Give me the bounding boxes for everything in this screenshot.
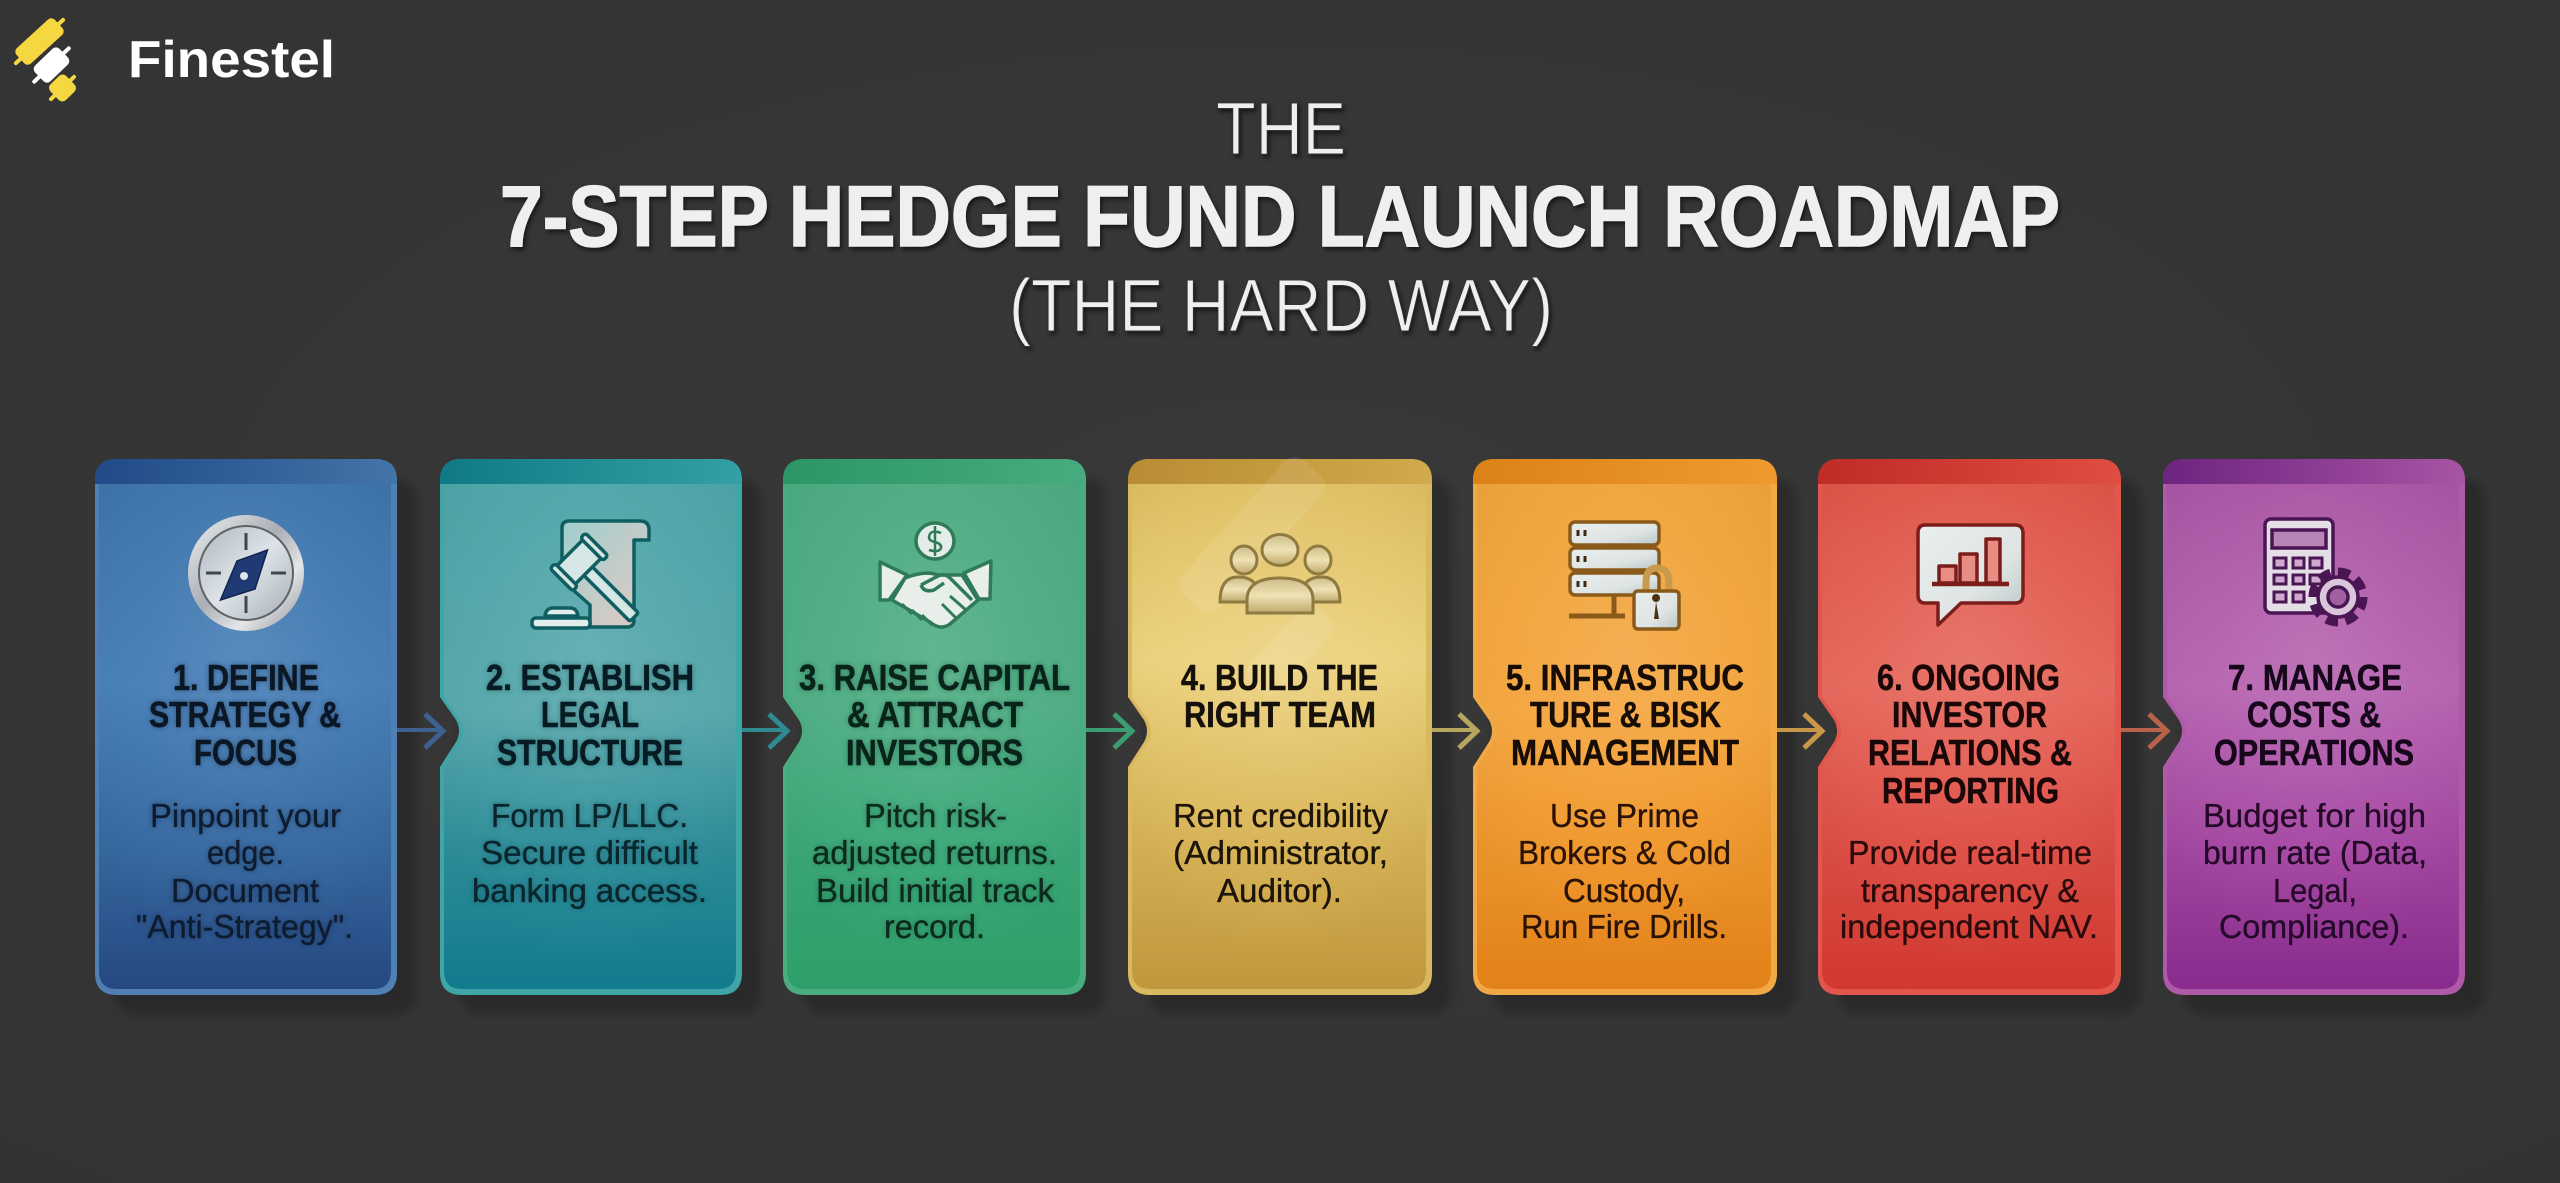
panel: step 4 build team: [1128, 451, 1432, 995]
description: Run Fire Drills.: [1521, 908, 1727, 945]
title line: main heading: 7-STEP HEDGE FUND LAUNCH ROADMAP: [500, 169, 2060, 265]
heading: MANAGEMENT: [1511, 732, 1739, 773]
description: (Administrator,: [1173, 834, 1388, 871]
description: "Anti-Strategy".: [136, 908, 353, 945]
panel: step 1 define strategy: [95, 459, 397, 995]
description: Auditor).: [1217, 872, 1342, 909]
description: Secure difficult: [481, 834, 698, 871]
icon: gavel and scroll: [532, 521, 652, 635]
description: edge.: [207, 834, 284, 871]
description: [2203, 797, 2427, 945]
logo: Finestel: [9, 12, 335, 107]
icon: compass: [188, 515, 304, 631]
description: Provide real-time: [1848, 834, 2092, 871]
title line: subtitle: (THE HARD WAY): [1009, 264, 1553, 347]
arrow 5 to 6: [1777, 714, 1822, 748]
heading: [149, 657, 341, 773]
title: [500, 87, 2060, 347]
description: burn rate (Data,: [2203, 834, 2427, 871]
arrow 3 to 4: [1086, 714, 1132, 748]
heading: COSTS &: [2247, 694, 2381, 735]
heading: 5. INFRASTRUC: [1506, 657, 1744, 698]
heading: 1. DEFINE: [173, 657, 319, 698]
heading: [1181, 657, 1378, 735]
heading: [2214, 657, 2414, 773]
description: Use Prime: [1550, 797, 1699, 834]
description: independent NAV.: [1840, 908, 2098, 945]
heading: OPERATIONS: [2214, 732, 2414, 773]
heading: [799, 657, 1070, 773]
panel: step 3 raise capital: [783, 459, 1086, 995]
panel: step 6 investor relations: [1818, 459, 2121, 995]
icon: chat with bar chart: [1918, 525, 2023, 625]
description: [1840, 834, 2098, 945]
decorative watermark: [1173, 451, 1338, 701]
heading: INVESTORS: [846, 732, 1023, 773]
icon: handshake with coin: [880, 523, 991, 627]
heading: 2. ESTABLISH: [486, 657, 694, 698]
heading: STRATEGY &: [149, 694, 341, 735]
description: Rent credibility: [1173, 797, 1388, 834]
description: Document: [171, 872, 319, 909]
heading: 7. MANAGE: [2228, 657, 2402, 698]
heading: [1506, 657, 1744, 773]
wordmark: Finestel: [128, 31, 335, 89]
description: transparency &: [1861, 872, 2079, 909]
heading: & ATTRACT: [847, 694, 1023, 735]
icon: server and lock: [1569, 522, 1679, 629]
arrow 1 to 2: [397, 714, 443, 748]
heading: RIGHT TEAM: [1184, 694, 1376, 735]
description: Form LP/LLC.: [491, 797, 688, 834]
panel: step 2 legal structure: [440, 459, 742, 995]
heading: STRUCTURE: [497, 732, 683, 773]
description: Brokers & Cold: [1518, 834, 1731, 871]
panel: step 7 manage costs: [2163, 459, 2465, 995]
description: [136, 797, 353, 945]
description: Custody,: [1563, 872, 1685, 909]
description: adjusted returns.: [812, 834, 1057, 871]
description: Pinpoint your: [150, 797, 341, 834]
heading: REPORTING: [1882, 770, 2059, 811]
description: Budget for high: [2203, 797, 2426, 834]
icon: calculator and gear: [2265, 519, 2363, 622]
panel: step 5 infrastructure: [1473, 459, 1777, 995]
icon: team: [1220, 534, 1340, 613]
heading: LEGAL: [541, 694, 639, 735]
description: [1173, 797, 1388, 909]
heading: [486, 657, 694, 773]
description: [812, 797, 1057, 945]
title line: THE: THE: [1216, 87, 1346, 170]
description: Compliance).: [2219, 908, 2409, 945]
description: [1518, 797, 1731, 945]
arrow 6 to 7: [2121, 714, 2167, 748]
arrow 2 to 3: [742, 714, 787, 748]
heading: RELATIONS &: [1868, 732, 2072, 773]
heading: 4. BUILD THE: [1181, 657, 1378, 698]
icon: candlesticks: [9, 12, 82, 107]
description: Pitch risk-: [864, 797, 1007, 834]
description: banking access.: [472, 872, 707, 909]
heading: TURE & BISK: [1530, 694, 1721, 735]
description: [472, 797, 707, 909]
heading: [1868, 657, 2072, 811]
heading: 6. ONGOING: [1877, 657, 2060, 698]
arrow 4 to 5: [1432, 714, 1477, 748]
heading: FOCUS: [194, 732, 297, 773]
description: Build initial track: [816, 872, 1054, 909]
description: record.: [884, 908, 985, 945]
heading: INVESTOR: [1892, 694, 2047, 735]
heading: 3. RAISE CAPITAL: [799, 657, 1070, 698]
description: Legal,: [2273, 872, 2357, 909]
card shadows: [115, 479, 2485, 1014]
